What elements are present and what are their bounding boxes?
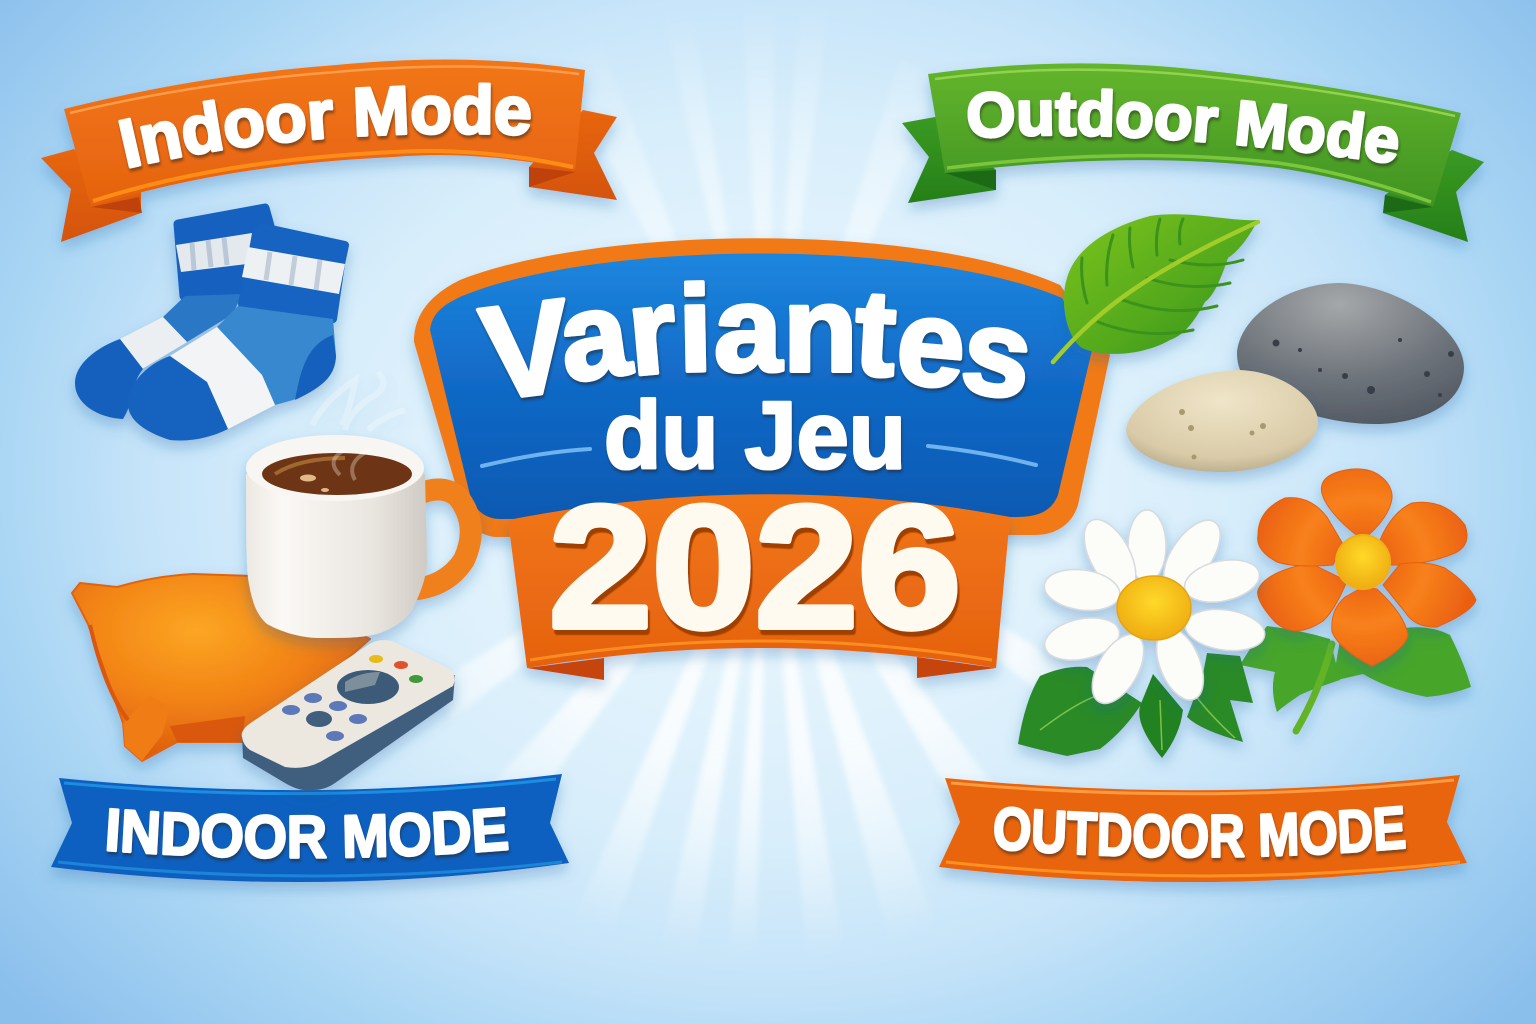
banner: Indoor Mode orange (41, 59, 620, 252)
icon: remote control (242, 640, 455, 790)
icon: coffee mug (246, 372, 471, 638)
heading: du Jeu: du Jeu (604, 382, 906, 489)
label: Outdoor Mode: Outdoor Mode (967, 88, 1401, 168)
icon: daisy (1041, 510, 1267, 712)
icon: pillow (72, 574, 370, 761)
icon: stones (1126, 283, 1464, 472)
title plaque (414, 238, 1110, 537)
mug handle (408, 490, 471, 590)
icon: dark stone (1237, 283, 1464, 424)
banner: Outdoor Mode green (900, 63, 1484, 252)
year ribbon (508, 469, 1010, 680)
front sock (128, 227, 345, 441)
icon: light stone (1126, 370, 1318, 472)
heading: 2026: 2026 (549, 469, 961, 664)
label: Indoor Mode: Indoor Mode (118, 82, 534, 173)
icon: leaf (1053, 214, 1258, 362)
banner: Outdoor Mode orange (936, 775, 1469, 896)
back sock (75, 208, 270, 419)
label: INDOOR MODE: INDOOR MODE (106, 807, 511, 864)
label: OUTDOOR MODE: OUTDOOR MODE (994, 805, 1408, 864)
banner: Indoor Mode blue (49, 774, 572, 896)
icon: socks (75, 208, 345, 441)
icon: green leaves under flowers (1018, 626, 1471, 758)
heading: Variantes: Variantes (473, 260, 1041, 428)
icon: orange flower (1258, 469, 1476, 666)
